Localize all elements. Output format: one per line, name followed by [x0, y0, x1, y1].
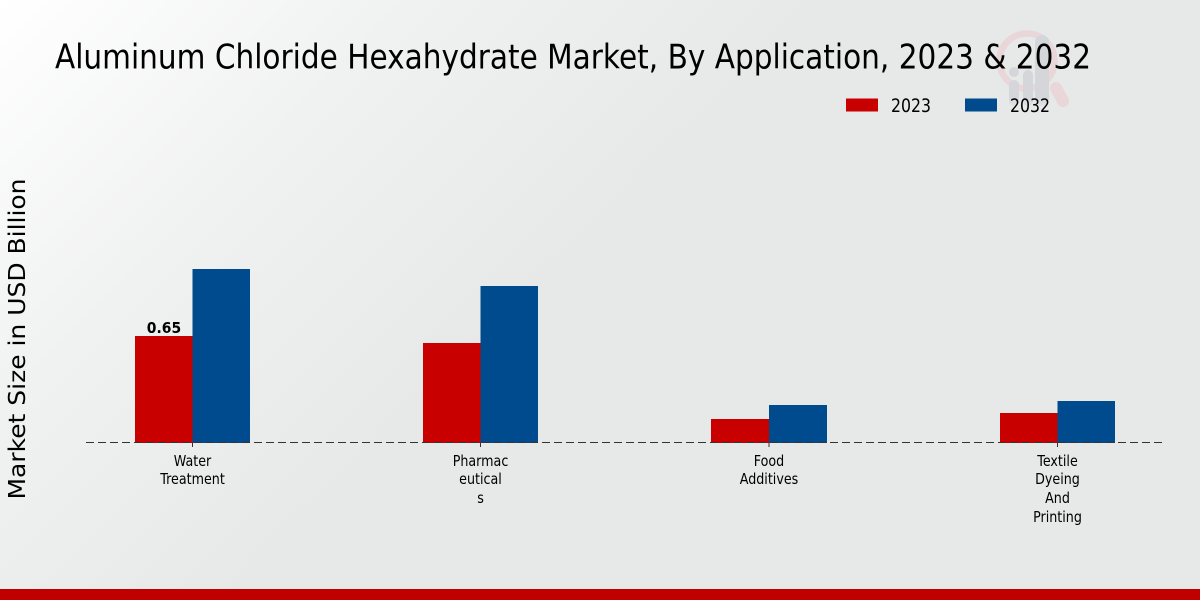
- category label: Pharmaceuticals: eutical: [459, 471, 502, 488]
- category label: Textile Dyeing And Printing: Dyeing: [1035, 471, 1080, 488]
- category label: Pharmaceuticals: s: [477, 490, 484, 507]
- legend item: 2032: [965, 96, 1050, 117]
- category label: Textile Dyeing And Printing: And: [1045, 490, 1070, 507]
- category label: Textile Dyeing And Printing: Printing: [1033, 509, 1082, 526]
- category label: Textile Dyeing And Printing: Textile: [1036, 453, 1078, 470]
- category label: Water Treatment: Water: [174, 453, 211, 470]
- bars: Water Treatment: [135, 269, 250, 443]
- category label: Food Additives: Additives: [740, 471, 798, 488]
- legend item: 2032: 2032: [1010, 96, 1050, 117]
- legend item: 2023: [846, 96, 931, 117]
- legend: [846, 96, 1050, 117]
- bar chart: [86, 269, 1164, 447]
- category label: Water Treatment: Treatment: [159, 471, 225, 488]
- data label: 0.65: [147, 319, 181, 337]
- category label: Food Additives: Food: [754, 453, 784, 470]
- bars: Pharmaceuticals: [423, 286, 538, 443]
- bars: Food Additives: [711, 405, 827, 443]
- watermark logo icon: [1000, 34, 1063, 106]
- bars: Textile Dyeing And Printing: [1000, 401, 1115, 443]
- y axis label: Market Size in USD Billion: [3, 178, 31, 500]
- footer bar: [0, 589, 1200, 600]
- category label: Pharmaceuticals: Pharmac: [453, 453, 508, 470]
- legend item: 2023: 2023: [891, 96, 931, 117]
- x axis baseline: [86, 442, 1164, 444]
